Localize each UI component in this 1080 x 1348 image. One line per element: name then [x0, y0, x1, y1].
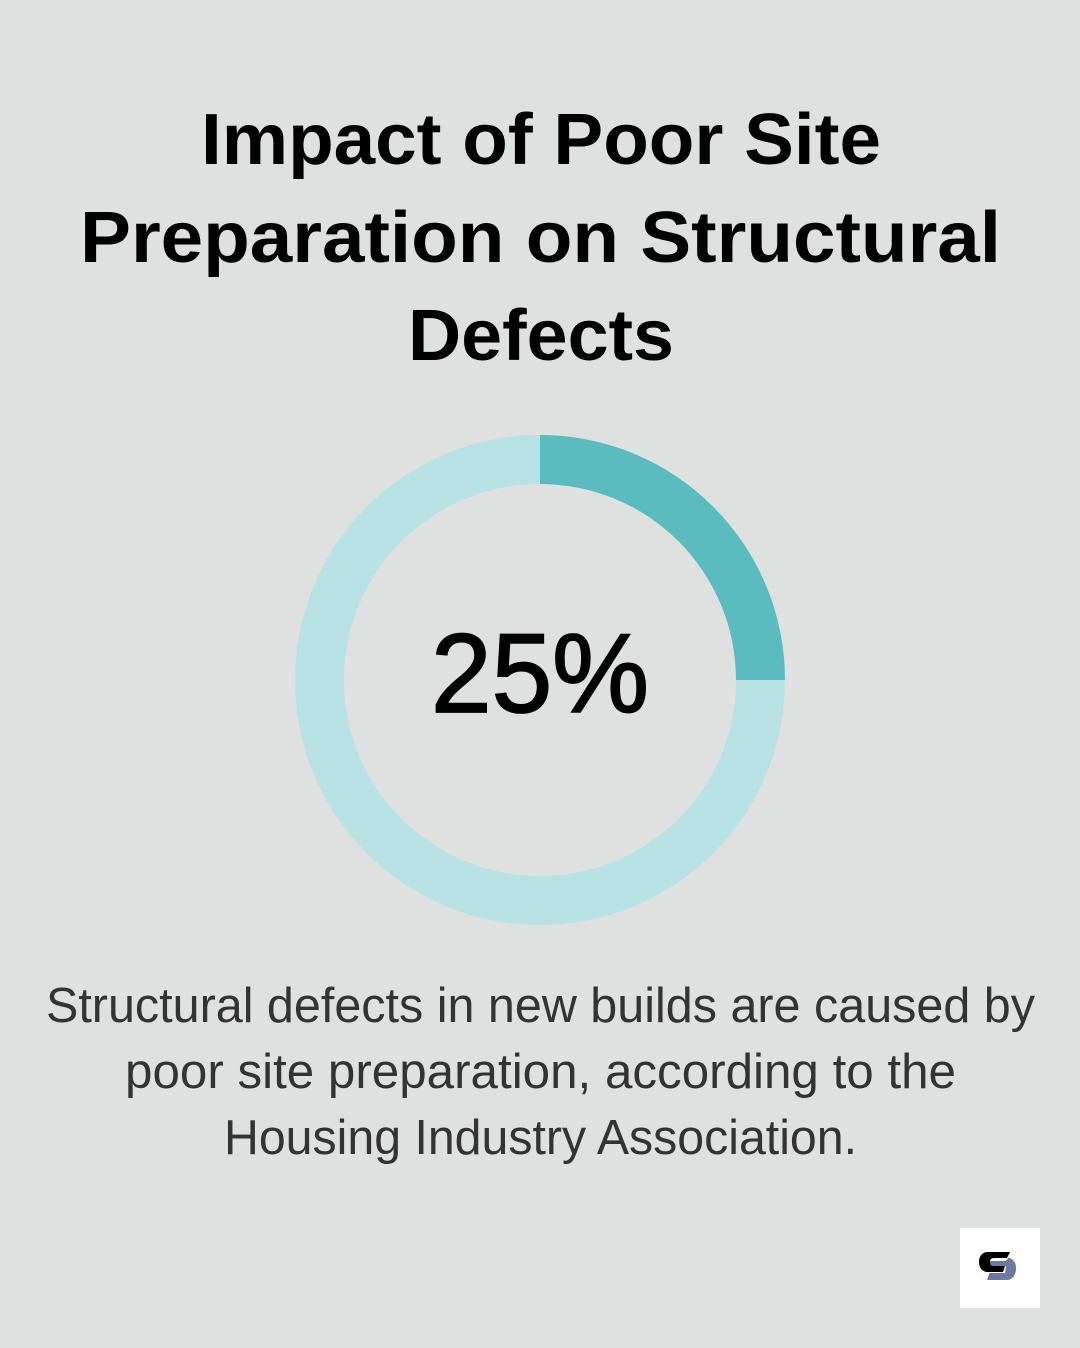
logo mark blue part	[987, 1258, 1016, 1280]
title: Defects	[408, 296, 674, 376]
donut chart: 25%	[320, 435, 785, 900]
donut track	[320, 460, 760, 900]
description text: Structural defects in new builds are caused by	[46, 979, 1035, 1033]
title: Preparation on Structural	[80, 198, 1001, 278]
logo badge	[960, 1228, 1040, 1308]
description text	[46, 979, 1035, 1165]
title	[80, 100, 1001, 376]
description text: poor site preparation, according to the	[125, 1045, 956, 1099]
title: Impact of Poor Site	[201, 100, 881, 180]
description text: Housing Industry Association.	[224, 1111, 857, 1165]
donut value: 25%	[431, 611, 649, 736]
donut highlighted segment	[540, 435, 785, 680]
logo mark black part	[979, 1252, 1010, 1272]
